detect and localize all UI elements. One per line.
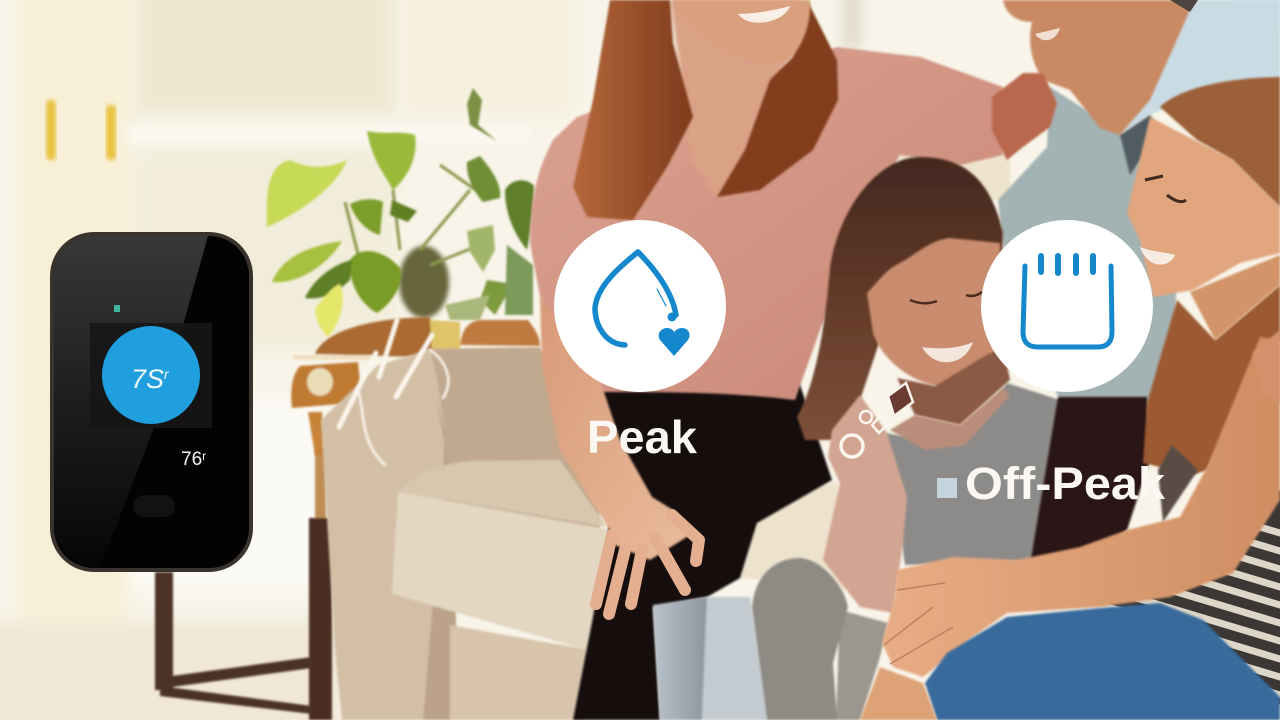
terracotta pots and table top bbox=[291, 317, 540, 455]
trousers and book in foreground bbox=[653, 558, 888, 720]
thermostat: button bbox=[133, 495, 175, 517]
sofa: cushion front bbox=[392, 492, 607, 651]
thermostat: teal indicator bbox=[114, 305, 120, 312]
peak: white circle bbox=[554, 220, 726, 392]
woman: hair bbox=[573, 0, 838, 220]
older girl: eye bbox=[1145, 176, 1186, 202]
man hand on woman's shoulder bbox=[992, 73, 1057, 160]
woman: black trousers bbox=[573, 385, 832, 720]
sofa: far cushion bbox=[740, 482, 845, 600]
small girl in grey shirt bbox=[797, 157, 1068, 613]
older girl: hair back bbox=[1143, 285, 1280, 475]
off-peak: label: Off-Peak bbox=[965, 458, 1166, 509]
small girl: face bbox=[867, 238, 1003, 386]
sofa: lower block bbox=[450, 625, 590, 720]
small girl: smile bbox=[922, 342, 973, 362]
man: hair tip bbox=[1170, 0, 1198, 12]
small girl: pink sleeve bbox=[823, 395, 907, 613]
thermostat: secondary reading: r bbox=[202, 449, 206, 463]
woman: forearm bbox=[540, 296, 690, 560]
woman: smile bbox=[738, 6, 790, 23]
man in pale blue shirt bbox=[998, 0, 1280, 410]
off-peak: small square bbox=[937, 478, 957, 498]
thermostat: screen panel bbox=[90, 323, 212, 428]
older girl: neckline strip bbox=[1158, 445, 1198, 522]
man: collar and shoulder bbox=[1120, 0, 1280, 135]
older girl: jeans bbox=[925, 603, 1280, 720]
sofa: back behind child bbox=[900, 130, 1010, 200]
dark gap between figures bbox=[1030, 397, 1150, 565]
sofa: arm bbox=[321, 349, 445, 720]
man: face and neck bbox=[1003, 0, 1193, 135]
small girl: hair bbox=[797, 157, 1003, 440]
woman: blouse bbox=[530, 47, 1003, 400]
small girl: neck bbox=[897, 345, 1010, 425]
thermostat: outer body bbox=[50, 232, 253, 572]
older girl: knee bbox=[860, 667, 937, 720]
older girl: hair top bbox=[1160, 77, 1280, 207]
older girl: smile bbox=[1140, 247, 1175, 265]
thermostat: secondary reading: 76 bbox=[181, 449, 202, 470]
book: left page bbox=[653, 597, 707, 720]
older girl: arm and hand bbox=[882, 337, 1280, 677]
sofa: arm shadow bbox=[423, 400, 460, 720]
side table with legs bbox=[155, 450, 332, 720]
peak badge bbox=[554, 220, 726, 463]
thermostat: dial reading: 7S bbox=[131, 364, 164, 394]
sofa: back bbox=[420, 347, 600, 560]
off-peak: calendar icon bbox=[1023, 256, 1112, 347]
thermostat device bbox=[50, 232, 253, 572]
plant with green leaves bbox=[267, 88, 534, 337]
small girl: grey shirt bbox=[885, 383, 1068, 565]
book: right page bbox=[702, 597, 767, 720]
man: smile bbox=[1035, 28, 1060, 40]
older girl: striped top bbox=[1110, 490, 1280, 705]
sofa: cushion top bbox=[400, 460, 607, 527]
small girl: far leg bbox=[836, 610, 888, 720]
peak: label: Peak bbox=[587, 411, 697, 463]
woman: face bbox=[672, 0, 810, 63]
older girl with striped top bbox=[860, 77, 1280, 720]
thermostat: dial reading: r bbox=[164, 366, 170, 382]
peak: drop and heart icon bbox=[595, 252, 690, 356]
older girl: neck bbox=[1190, 255, 1280, 340]
scribble lines over sofa bbox=[339, 320, 448, 465]
older girl: finger lines bbox=[884, 583, 953, 664]
woman: neck and chest bbox=[670, 0, 800, 197]
small girl: eyes bbox=[910, 292, 982, 303]
thermostat: blue dial bbox=[102, 326, 200, 424]
beige sofa bbox=[321, 130, 1010, 720]
off-peak badge bbox=[937, 220, 1166, 509]
small girl: collar bbox=[890, 388, 1010, 450]
thermostat: glass glare bbox=[54, 236, 208, 568]
man: dark placket bbox=[1120, 115, 1160, 175]
woman in pink blouse bbox=[530, 0, 1003, 720]
older girl: face bbox=[1127, 117, 1280, 297]
thermostat: black face bbox=[54, 236, 249, 568]
woman: fingers bbox=[596, 515, 699, 614]
small girl: near leg bbox=[752, 558, 848, 720]
older girl: hand on shoulder bbox=[1253, 330, 1280, 403]
small tag glyphs on sleeve bbox=[841, 383, 913, 457]
man: shirt bbox=[998, 87, 1180, 410]
off-peak: white circle bbox=[981, 220, 1153, 392]
